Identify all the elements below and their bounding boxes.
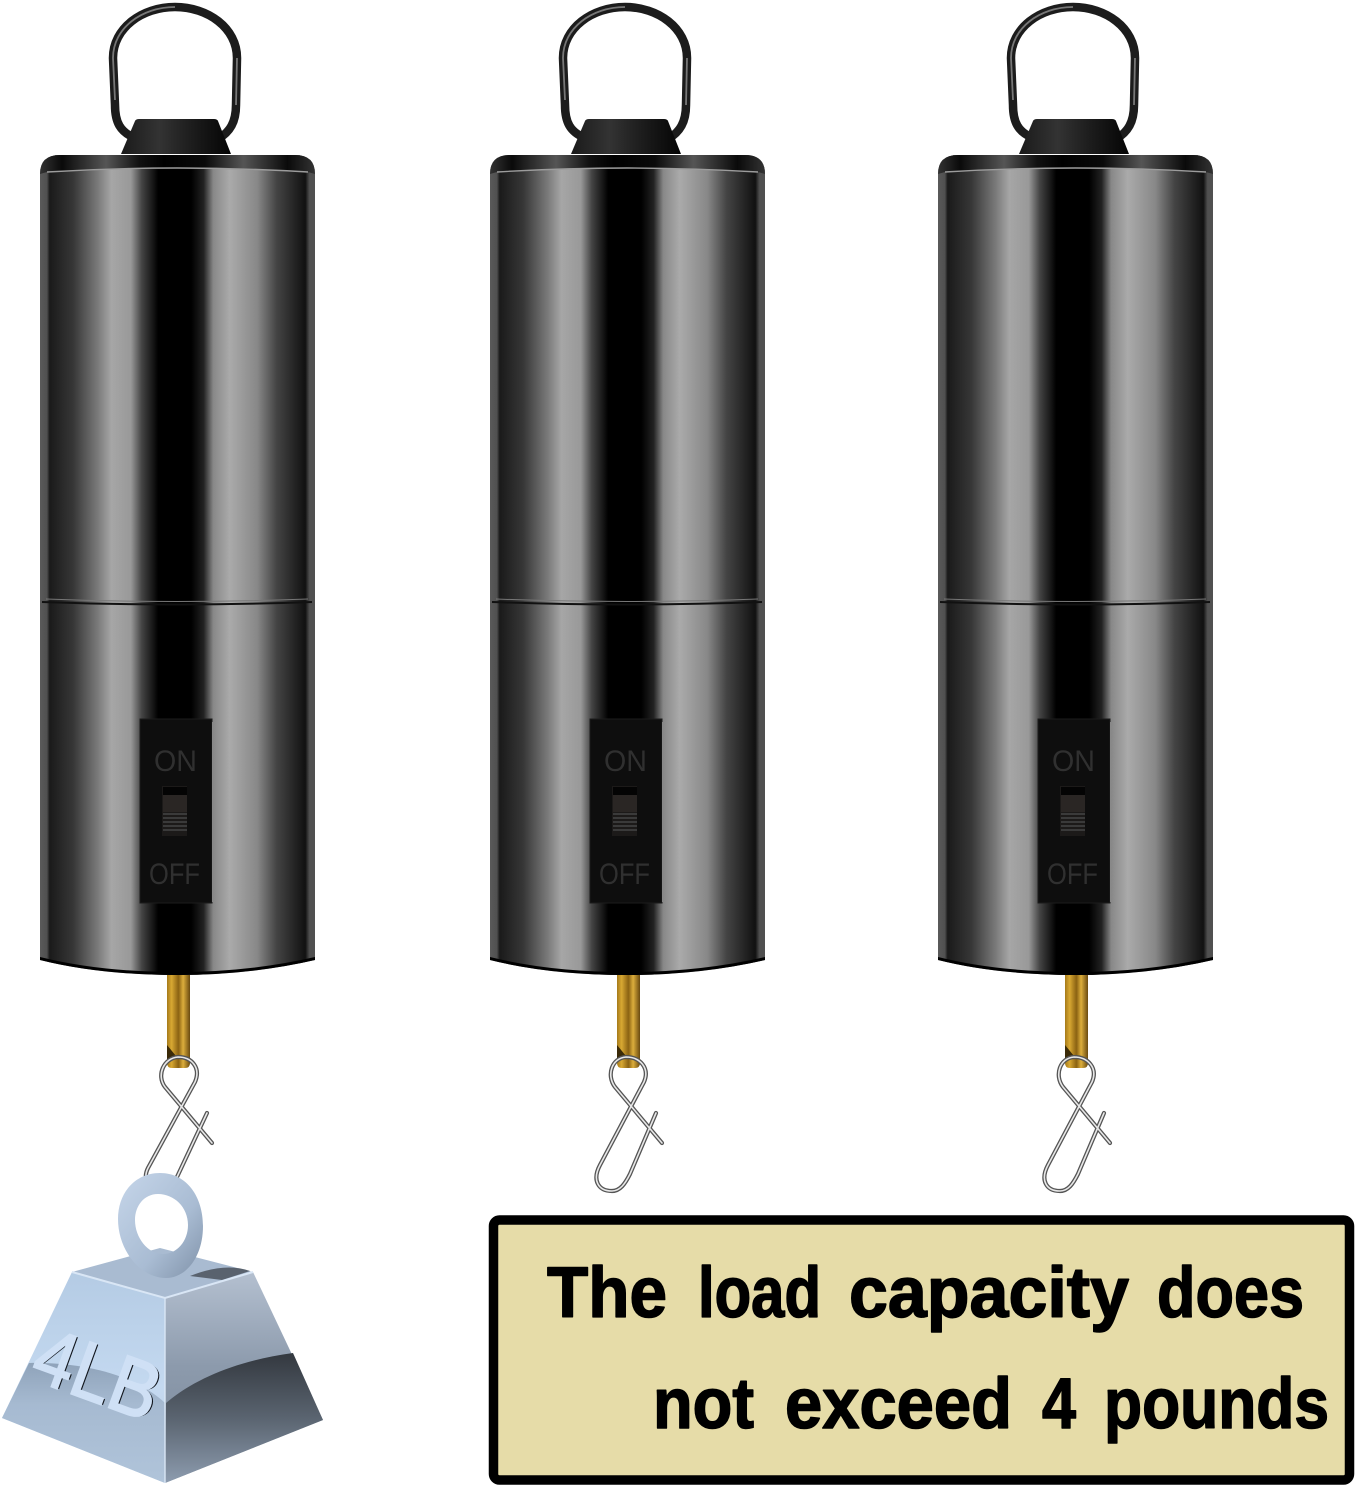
- weight left reflection: [2, 1363, 165, 1483]
- weight lettering: 4LB: [24, 1311, 175, 1438]
- callout text: 4: [1042, 1365, 1076, 1444]
- switch label: ON: ON: [154, 745, 197, 778]
- callout text: [547, 1254, 1329, 1444]
- switch label: OFF: OFF: [149, 858, 200, 891]
- motor 1 with hook, switch and weight: [40, 7, 315, 1068]
- callout text: does: [1157, 1254, 1304, 1333]
- switch label: OFF: OFF: [1047, 858, 1098, 891]
- motor 3 with hook and switch: [938, 7, 1213, 1191]
- weight right face: [165, 1272, 323, 1483]
- callout text: pounds: [1104, 1365, 1329, 1444]
- weight lettering: 4LB: [22, 1310, 173, 1438]
- weight right reflection: [165, 1353, 323, 1483]
- switch label: ON: ON: [604, 745, 647, 778]
- callout: load capacity: [494, 1220, 1350, 1480]
- switch label: OFF: OFF: [599, 858, 650, 891]
- callout text: load: [698, 1254, 821, 1333]
- weight top face: [72, 1248, 253, 1298]
- weight left face: [2, 1272, 165, 1483]
- callout text: capacity: [849, 1254, 1129, 1333]
- callout text: The: [547, 1254, 667, 1333]
- callout text: not: [653, 1365, 754, 1444]
- motor 2 with hook and switch: [490, 7, 765, 1191]
- hook on motor 1: [146, 1057, 212, 1191]
- switch label: ON: ON: [1052, 745, 1095, 778]
- weight ring: [118, 1173, 203, 1278]
- callout text: exceed: [785, 1365, 1012, 1444]
- 4 lb weight: [2, 1173, 323, 1483]
